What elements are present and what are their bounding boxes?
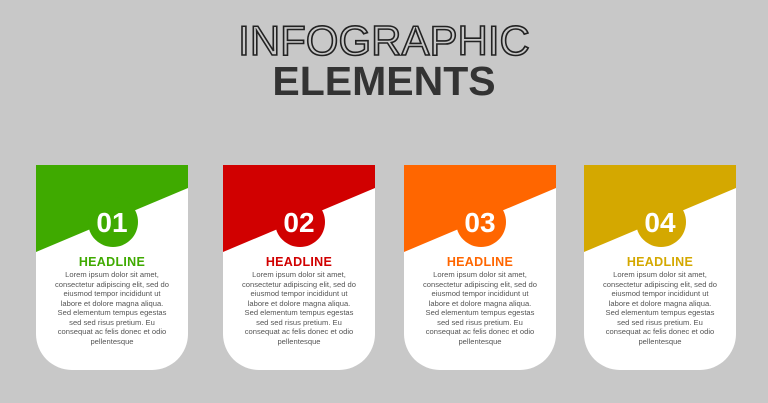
panel: card 03: 03: [464, 207, 496, 238]
panel: card 03: labore et dolore magna aliqua.: [429, 298, 531, 308]
panel: card 03: [404, 165, 556, 370]
panel: card 01: Lorem ipsum dolor sit amet,: [65, 270, 159, 279]
panel: card 04: Lorem ipsum dolor sit amet,: [613, 270, 707, 279]
panel: card 04: 04: [644, 207, 676, 238]
panel: card 02: consequat ac felis donec et odio: [245, 327, 353, 336]
panel: card 02: 02: [283, 207, 315, 238]
panel: card 03: sed sed risus pretium. Eu: [437, 318, 523, 326]
panel: card 02: pellentesque: [277, 336, 321, 346]
panel: card 02: Sed elementum tempus egestas: [245, 308, 353, 317]
panel: card 03: HEADLINE: [447, 255, 513, 269]
panel: card 04: eiusmod tempor incididunt ut: [611, 289, 709, 298]
panel: card 01: consectetur adipiscing elit, sed do: [55, 280, 169, 288]
panel: card 01: [36, 165, 188, 370]
panel: card 01: eiusmod tempor incididunt ut: [63, 289, 161, 298]
panel: card 02: [223, 165, 375, 370]
panel: card 01: Sed elementum tempus egestas: [58, 308, 166, 317]
panel: card 03: eiusmod tempor incididunt ut: [431, 289, 529, 298]
panel: card 03: Sed elementum tempus egestas: [426, 308, 534, 317]
panel: card 02: HEADLINE: [266, 255, 332, 269]
panel: card 04: Sed elementum tempus egestas: [606, 308, 714, 317]
panel: card 01: labore et dolore magna aliqua.: [61, 298, 163, 308]
panel: card 02: sed sed risus pretium. Eu: [256, 318, 342, 326]
panel: card 02: eiusmod tempor incididunt ut: [250, 289, 348, 298]
panel: card 04: [584, 165, 736, 370]
panel: card 03: Lorem ipsum dolor sit amet,: [433, 270, 527, 279]
panel: card 04: sed sed risus pretium. Eu: [617, 318, 703, 326]
panel: card 03: consequat ac felis donec et odio: [426, 327, 534, 336]
panel: card 04: HEADLINE: [627, 255, 693, 269]
panel: card 02: labore et dolore magna aliqua.: [248, 298, 350, 308]
panel: card 03: consectetur adipiscing elit, sed do: [423, 280, 537, 288]
panel: card 03: pellentesque: [458, 336, 502, 346]
panel: card 04: pellentesque: [638, 336, 682, 346]
panel: card 04: consequat ac felis donec et odio: [606, 327, 714, 336]
panel: card 01: 01: [96, 207, 128, 238]
panel: card 02: Lorem ipsum dolor sit amet,: [252, 270, 346, 279]
title line 2: ELEMENTS: [272, 58, 496, 104]
panel: card 04: labore et dolore magna aliqua.: [609, 298, 711, 308]
panel: card 01: HEADLINE: [79, 255, 145, 269]
panel: card 01: consequat ac felis donec et odio: [58, 327, 166, 336]
panel: card 01: sed sed risus pretium. Eu: [69, 318, 155, 326]
panel: card 04: consectetur adipiscing elit, sed do: [603, 280, 717, 288]
panel: card 02: consectetur adipiscing elit, sed do: [242, 280, 356, 288]
title line 1: INFOGRAPHIC: [238, 17, 530, 64]
panel: card 01: pellentesque: [90, 336, 134, 346]
